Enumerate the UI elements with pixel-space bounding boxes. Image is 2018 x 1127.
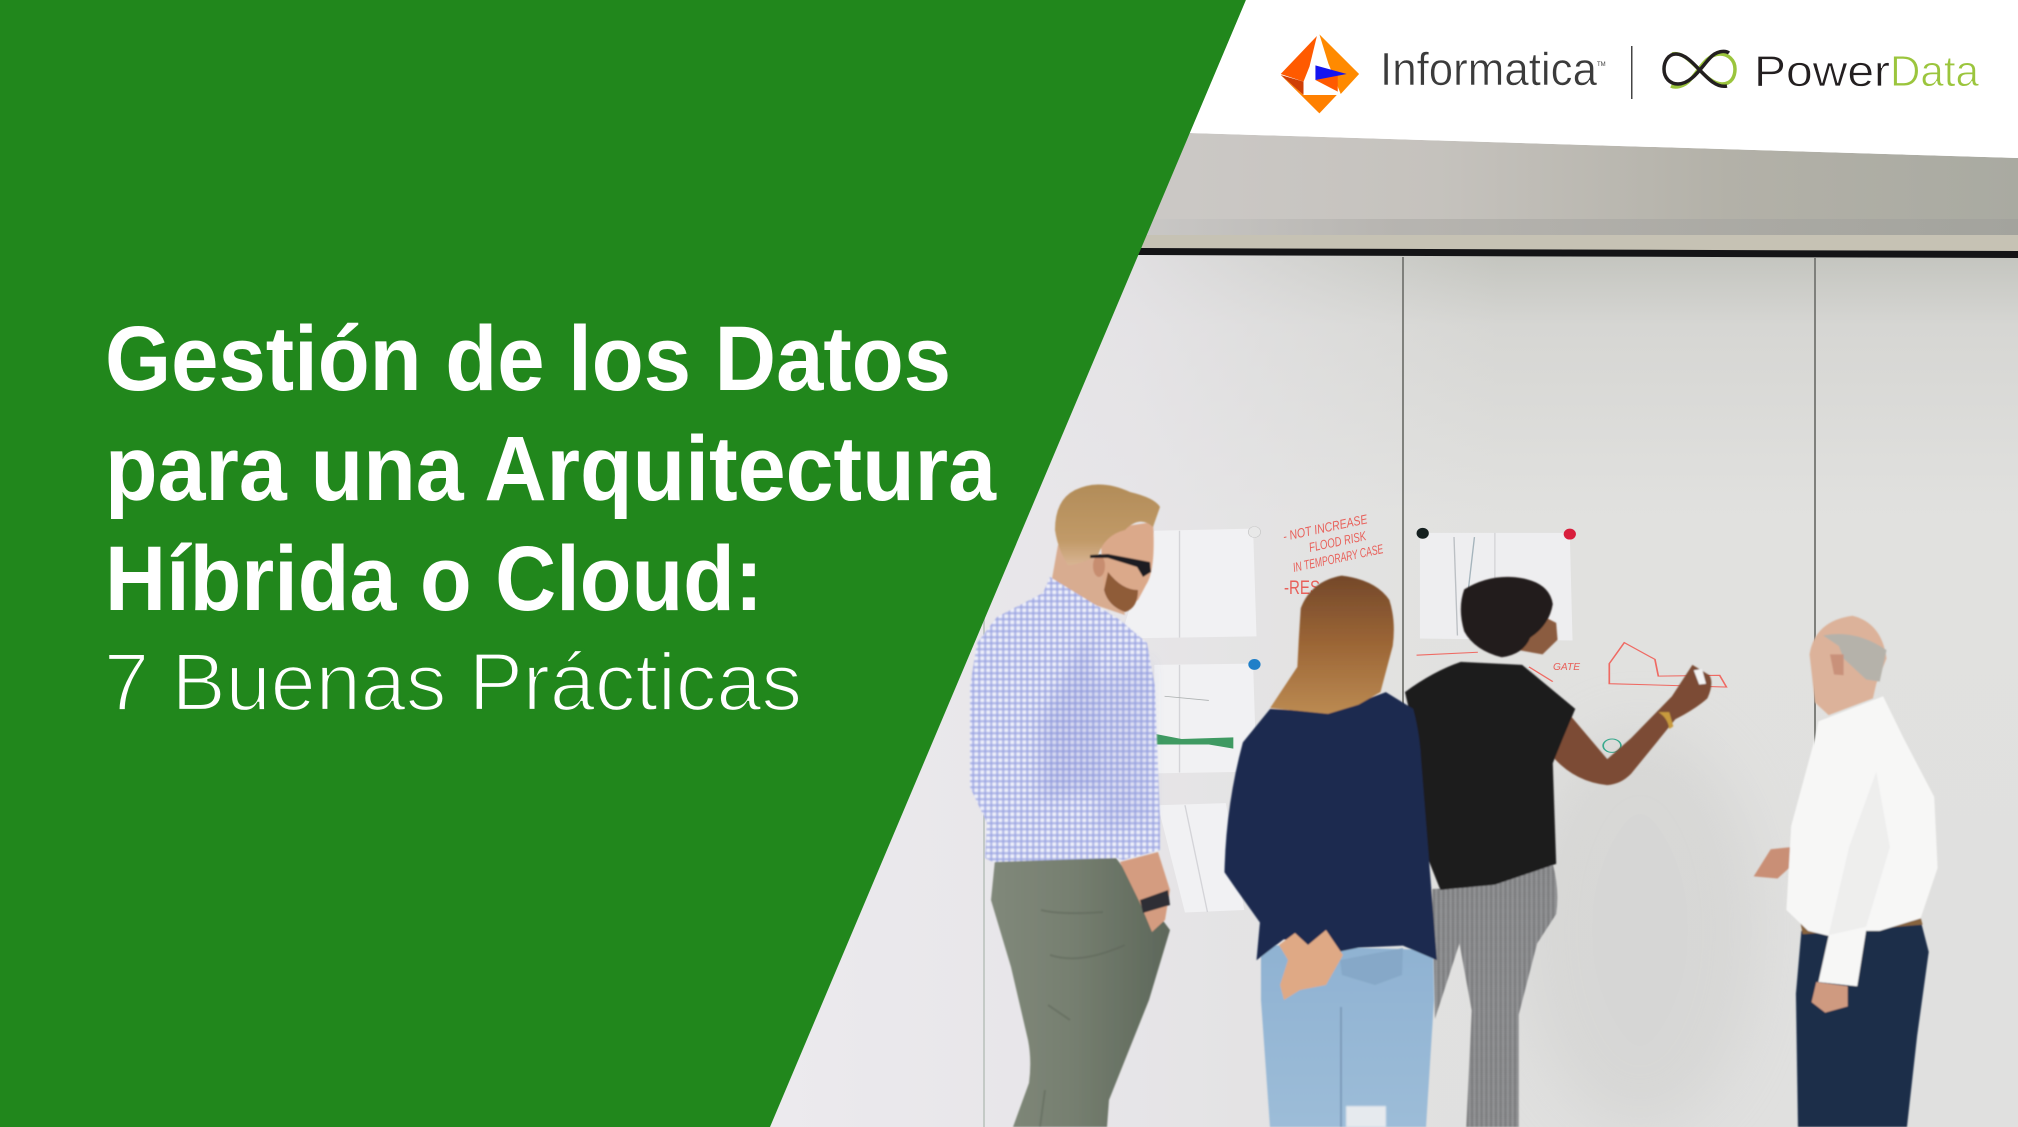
curly hair [1461,577,1553,657]
face [1100,522,1154,612]
ear [1830,654,1844,675]
sleeve shade [1090,660,1150,830]
person: older man in white shirt [1754,616,1938,1127]
neck [1050,545,1125,615]
person: man in checked shirt [970,484,1170,1127]
person: woman in navy sweater [1224,576,1437,1127]
bracelet [1658,712,1673,729]
wordmark: Data: Data [1890,47,1979,96]
raised hand [1754,847,1791,879]
ceiling light strip [1130,235,2018,251]
ceiling [1130,133,2018,250]
note: GATE: GATE [1553,662,1580,673]
navy sweater [1224,576,1437,960]
red whiteboard drawing [1609,643,1726,687]
head [1810,616,1887,715]
paper 2 [1154,664,1256,773]
title line 1: Gestión de los Datos [105,308,951,410]
patterned trousers [1432,864,1557,1127]
white object at bottom [1346,1106,1386,1127]
trouser creases [1040,910,1125,1127]
note: RES: -RES [1284,578,1320,599]
trousers [991,858,1170,1127]
ear [1093,555,1105,577]
black top [1405,662,1575,890]
note line 1: - NOT INCREASE [1282,511,1369,544]
note line 3: IN TEMPORARY CASE [1292,541,1385,575]
title [105,308,997,630]
black wall rail [1130,248,2018,258]
marker [1694,669,1706,685]
wordmark: Informatica: Informatica [1380,43,1597,95]
jeans seam [1340,1007,1342,1127]
shirt shade [1040,630,1100,800]
long hair [1270,576,1394,714]
subtitle: 7 Buenas Prácticas [104,637,802,728]
magnet black [1417,528,1429,539]
paper 3 [1158,803,1244,912]
beard [1104,572,1138,612]
forearm [1120,852,1170,932]
logo: PowerData [1664,47,1979,96]
green title panel [0,0,1246,1127]
photo: team at a whiteboard [770,133,2018,1127]
glasses [1090,554,1151,577]
person: woman in black top [1405,577,1711,1127]
bare arm with hand [1553,665,1711,785]
wordmark: Power: Power [1754,47,1890,96]
paper 4 [1420,533,1573,641]
photo background wall [770,250,2018,1127]
red arrows [1417,652,1553,682]
lower hand [1812,982,1848,1013]
magnet red [1564,529,1576,540]
white shirt [1786,696,1938,986]
ceiling shadow band [1130,219,2018,236]
logo divider [1631,46,1632,99]
magnet white [1248,527,1261,537]
watch [1140,890,1170,913]
jeans pocket [1340,948,1403,985]
checked shirt [970,577,1160,862]
shirt shading [1829,772,1890,935]
shadow on the whiteboard [1520,730,1760,1127]
left wall light tint [770,250,1500,1127]
grey hair [1823,634,1887,682]
icon: Informatica diamond [1281,34,1359,113]
title line 3: Híbrida o Cloud: [105,528,763,630]
navy trousers [1796,920,1929,1127]
face [1519,612,1558,654]
note line 2: FLOOD RISK [1308,528,1368,555]
paper 1 [1120,529,1256,638]
wall panel joints [984,257,1815,1127]
green map strip on paper 2 [1156,734,1233,749]
logo: Informatica [1281,34,1606,113]
title line 2: para una Arquitectura [105,418,997,520]
belt [1800,917,1923,934]
white logo header [1190,0,2018,158]
icon: infinity knot [1664,51,1735,87]
hair [1055,484,1160,565]
paper fold lines [1165,531,1495,912]
magnet blue [1248,659,1261,670]
hands [1279,930,1343,1000]
handwriting: flood risk note [1282,511,1580,673]
people group [970,484,1938,1127]
board contents, drawn in a scaled coordinate space [1120,527,1726,912]
jeans [1261,945,1434,1127]
trademark mark: TM [1597,62,1606,68]
green tree sketch [1603,739,1621,752]
